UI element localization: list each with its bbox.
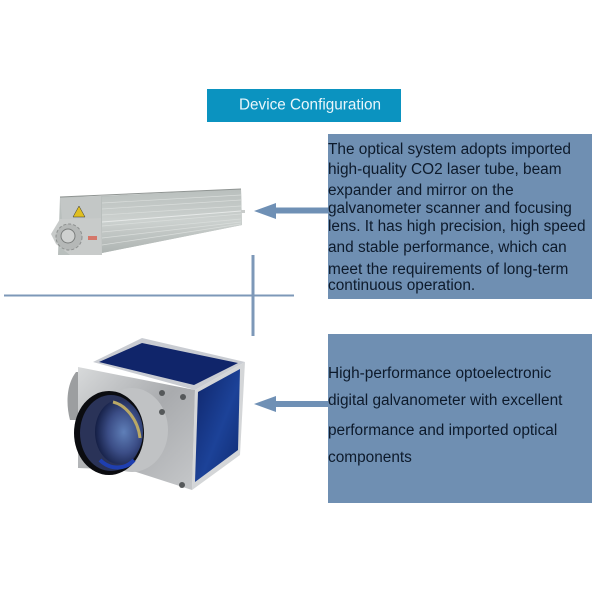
panel: optical system description: lens. It has high precision, high speed [328,218,586,235]
panel: optical system description [328,134,592,299]
panel: optical system description: galvanometer scanner and focusing [328,200,572,217]
panel: galvanometer description: digital galvanometer with excellent [328,392,563,409]
panel: galvanometer description: High-performance optoelectronic [328,365,552,382]
image: CO2 laser tube [51,189,245,255]
panel: optical system description: meet the requirements of long-term [328,261,568,278]
panel: galvanometer description: performance and imported optical [328,422,557,439]
divider cross [4,255,294,336]
panel: optical system description: expander and mirror on the [328,182,514,199]
panel: galvanometer description: components [328,449,412,466]
image: galvanometer scanner head [68,338,245,490]
arrow: to galvanometer [254,396,328,412]
title banner [207,89,401,122]
panel: optical system description: continuous operation. [328,277,475,294]
panel: galvanometer description [328,334,592,503]
panel: optical system description: and stable performance, which can [328,239,567,256]
arrow: to laser tube [254,203,328,219]
title banner: Device Configuration [239,96,381,114]
panel: optical system description: The optical system adopts imported [328,141,571,158]
panel: optical system description: high-quality CO2 laser tube, beam [328,161,562,178]
